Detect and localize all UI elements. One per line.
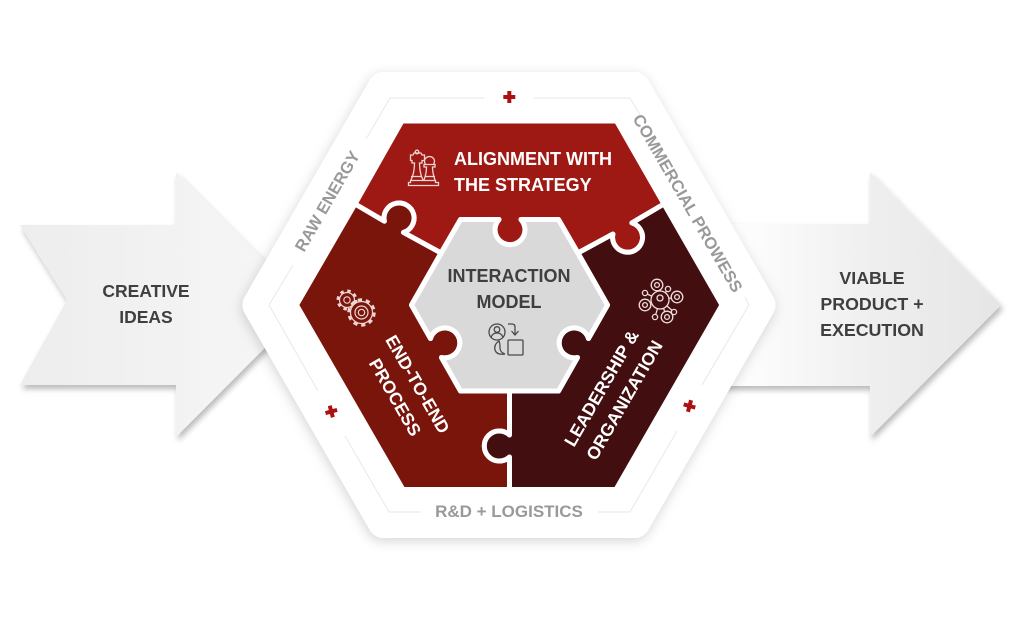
plus sign: bottom left [324, 404, 339, 419]
outer white hexagon [258, 88, 760, 522]
puzzle piece: alignment with the strategy [355, 121, 664, 253]
arrow label: viable product and execution: PRODUCT + [820, 294, 924, 314]
puzzle piece: end-to-end process [296, 203, 510, 490]
ring label: raw energy: RAW ENERGY [292, 148, 364, 255]
heading: leadership and organization: LEADERSHIP & [560, 326, 643, 450]
icon: chess pieces [408, 150, 438, 186]
heading: alignment with the strategy [454, 149, 612, 195]
plus sign: bottom right [682, 399, 697, 413]
arrow: creative ideas [20, 172, 308, 437]
ring label: commercial prowess: COMMERCIAL PROWESS [629, 111, 746, 296]
arrow label: creative ideas: IDEAS [119, 307, 173, 327]
ring label: R&D + logistics: R&D + LOGISTICS [435, 502, 583, 521]
arrow label: viable product and execution: VIABLE [839, 268, 905, 288]
heading: interaction model: MODEL [476, 292, 542, 312]
heading: alignment with the strategy: THE STRATEGY [454, 175, 592, 195]
heading: interaction model: INTERACTION [448, 266, 570, 286]
heading: alignment with the strategy: ALIGNMENT WITH [454, 149, 612, 169]
arrow label: viable product and execution: EXECUTION [820, 320, 924, 340]
heading: leadership and organization: ORGANIZATION [582, 337, 667, 464]
arrow label: viable product and execution [820, 268, 924, 340]
icon: interaction [489, 324, 523, 355]
arrow: viable product and execution [700, 172, 1001, 437]
heading: end-to-end process: PROCESS [365, 355, 425, 440]
icon: gears [338, 291, 374, 325]
icon: network [639, 279, 683, 323]
plus sign: top [503, 91, 515, 103]
puzzle piece: interaction model [412, 220, 608, 391]
heading: interaction model [448, 266, 570, 312]
heading: end-to-end process: END-TO-END [381, 332, 454, 437]
arrow label: creative ideas: CREATIVE [102, 281, 190, 301]
arrow label: creative ideas [102, 281, 190, 327]
puzzle piece: leadership and organization [484, 204, 722, 490]
